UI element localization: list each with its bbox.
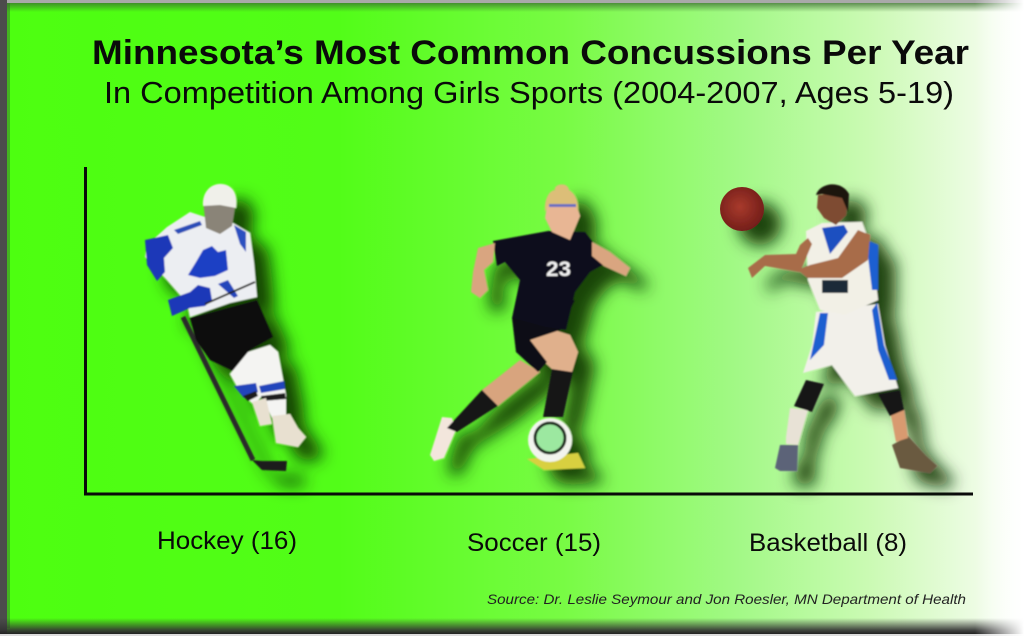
label: soccer: Soccer (15) [467,529,601,557]
source note: Source: Dr. Leslie Seymour and Jon Roesler, MN Department of Health [487,591,966,607]
icon: basketball [720,187,764,231]
icon: soccer player [430,184,630,470]
icon: hockey player [145,184,306,471]
chart axes [86,167,973,494]
label: basketball: Basketball (8) [749,529,907,557]
subtitle: In Competition Among Girls Sports (2004-2007, Ages 5-19) [104,75,954,110]
icon: basketball player [748,184,937,473]
icon: soccer player: 23 [546,258,571,281]
title: Minnesota’s Most Common Concussions Per Year [92,34,969,72]
label: hockey: Hockey (16) [157,527,297,555]
